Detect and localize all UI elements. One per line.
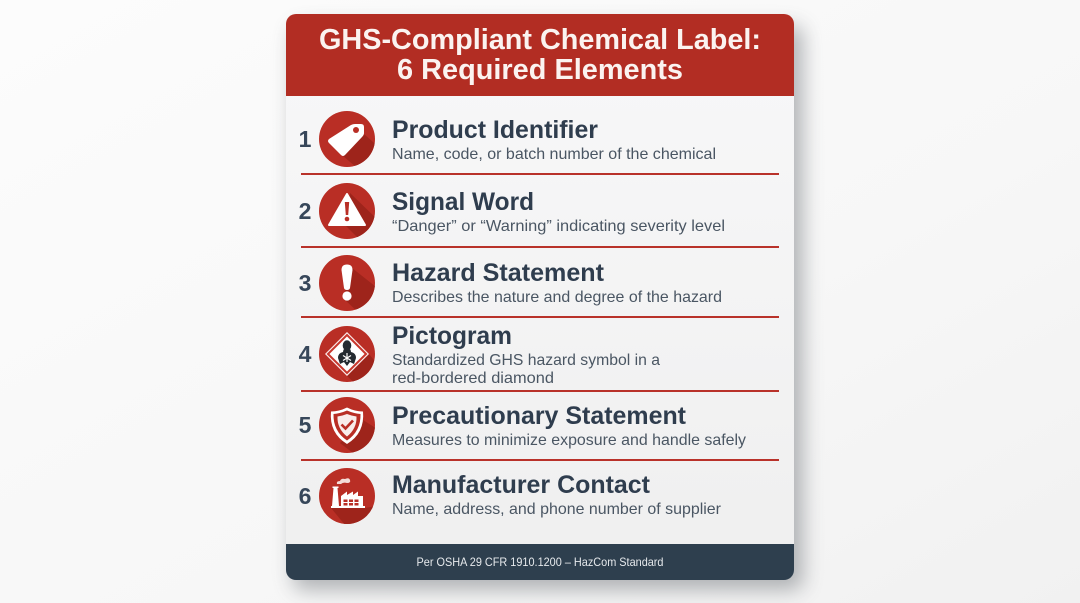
row 5: precautionary statement: Measures to minimize exposure and handle safely — [392, 432, 746, 449]
icon: tag — [319, 111, 375, 167]
footer band — [286, 544, 794, 580]
row 6: manufacturer contact: Manufacturer Contact — [392, 471, 651, 499]
icon: GHS diamond — [319, 326, 375, 382]
icon: warning triangle — [319, 183, 375, 239]
row 6: manufacturer contact — [299, 468, 722, 530]
row 1: product identifier: 1 — [299, 126, 312, 152]
title: GHS-Compliant Chemical Label: — [319, 24, 761, 56]
row 6: manufacturer contact: Name, address, and phone number of supplier — [392, 501, 722, 518]
row 2: signal word: “Danger” or “Warning” indicating severity level — [392, 218, 725, 235]
row 1: product identifier — [299, 111, 716, 172]
header band — [286, 14, 794, 96]
title: 6 Required Elements — [397, 54, 683, 86]
row 2: signal word: Signal Word — [392, 188, 534, 216]
row 1: product identifier: Product Identifier — [392, 116, 598, 144]
row 5: precautionary statement — [299, 397, 746, 453]
row 3: hazard statement: 3 — [299, 270, 311, 296]
row 4: pictogram: Standardized GHS hazard symbol in a — [392, 352, 660, 369]
row 1: product identifier: Name, code, or batch number of the chemical — [392, 146, 716, 163]
row 4: pictogram: 4 — [299, 341, 312, 367]
panel: label card — [286, 14, 794, 580]
icon: exclamation mark — [319, 255, 375, 311]
row 2: signal word: 2 — [299, 198, 311, 224]
row 5: precautionary statement: 5 — [299, 412, 312, 438]
row 4: pictogram — [298, 326, 660, 383]
row 2: signal word — [299, 183, 725, 242]
icon: factory — [319, 468, 375, 524]
row 4: pictogram: red-bordered diamond — [392, 370, 554, 387]
row 3: hazard statement — [299, 255, 722, 316]
icon: shield with check — [319, 397, 375, 453]
title — [319, 24, 761, 86]
footer text: Per OSHA 29 CFR 1910.1200 – HazCom Standard — [416, 555, 664, 569]
row 6: manufacturer contact: 6 — [299, 483, 311, 509]
row 3: hazard statement: Hazard Statement — [392, 259, 605, 287]
row 4: pictogram: Pictogram — [392, 322, 512, 350]
row 5: precautionary statement: Precautionary Statement — [392, 402, 687, 430]
row 3: hazard statement: Describes the nature and degree of the hazard — [392, 289, 722, 306]
